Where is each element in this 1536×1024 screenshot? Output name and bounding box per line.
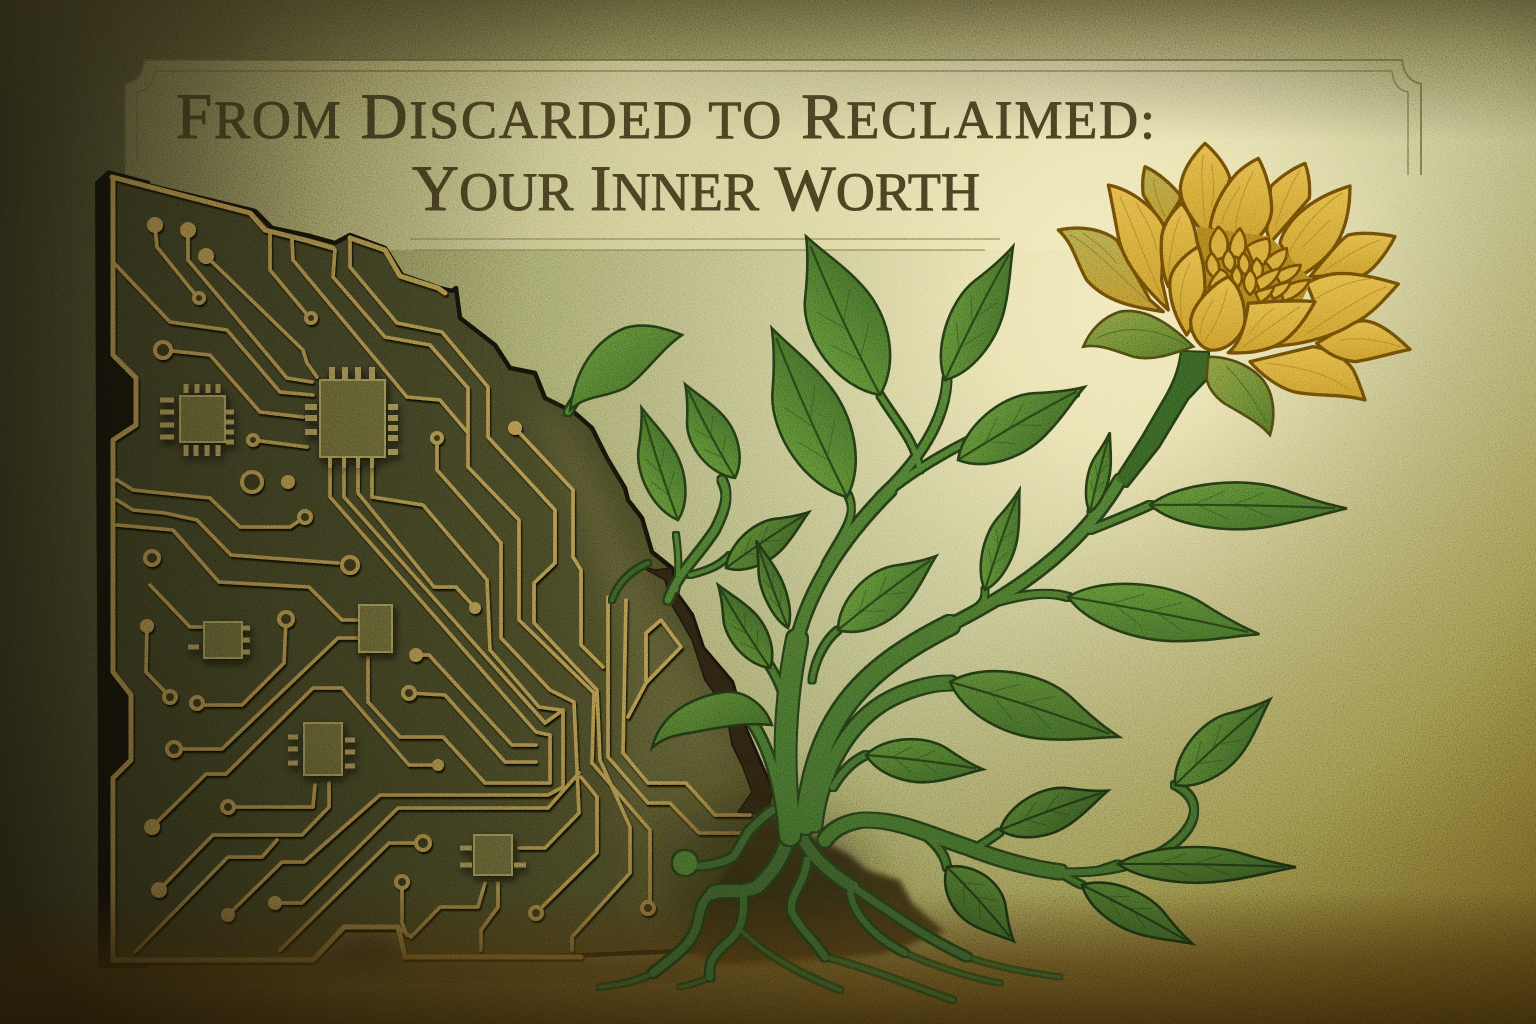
leaf: large right (1150, 481, 1347, 531)
petal inner left front (1170, 247, 1205, 335)
circuit board (95, 170, 800, 975)
plant (568, 143, 1410, 1000)
gold traces (112, 177, 750, 960)
leaf: base left, custom curve (652, 692, 772, 748)
petal back right (1267, 163, 1310, 243)
leaf: low branch right (1073, 868, 1202, 960)
petal right point (1310, 233, 1395, 277)
petal veins (1120, 155, 1400, 390)
leaf: top centre (772, 222, 912, 411)
leaf: near crack, custom curve (570, 326, 682, 410)
olive petal veins (1070, 180, 1165, 300)
chip: tall middle (359, 605, 392, 652)
ground shadow (0, 890, 1536, 1024)
board dark side edge (95, 170, 150, 968)
leaf: far right low (1159, 681, 1285, 802)
olive back petal left (1058, 228, 1163, 312)
flower heart base (1197, 227, 1312, 310)
leaf: left small 1 (622, 402, 697, 526)
sepal left (1083, 311, 1193, 358)
flower (1058, 143, 1410, 435)
leaf: low branch up (993, 770, 1115, 849)
leaf: lower left slim (746, 537, 798, 632)
board border trace (112, 177, 581, 960)
petal upper right (1280, 186, 1350, 277)
olive back petal (1143, 167, 1180, 227)
petal centre front (1191, 277, 1245, 350)
petal lower right (1250, 347, 1365, 400)
leaf: lower left small (703, 576, 785, 678)
board shadow on ground (112, 935, 700, 975)
petal left large (1108, 185, 1168, 310)
chip: lower middle (288, 723, 355, 775)
leaf: top right of centre (922, 235, 1034, 391)
crack (640, 566, 772, 815)
petal right big (1273, 273, 1398, 347)
background left shading (0, 0, 340, 1024)
trace lines (114, 225, 317, 447)
leaf: lower right (941, 653, 1129, 765)
stems (568, 352, 1208, 885)
leaf: left small 2 (666, 375, 753, 488)
petal top back (1180, 143, 1230, 233)
trace rings (145, 293, 654, 919)
leaf: low branch tip (1118, 846, 1296, 884)
root mound (650, 800, 945, 965)
sepal veins (1097, 330, 1267, 423)
leaf: slim upper (970, 485, 1034, 595)
trace pads (140, 217, 522, 922)
title text (176, 81, 1155, 225)
small heart petals (1206, 227, 1310, 303)
chip: large centre (305, 367, 398, 468)
chip: bottom (460, 835, 526, 875)
leaf: low centre (863, 733, 986, 790)
chip: small left (188, 622, 250, 658)
worn edge of board (530, 400, 735, 930)
leaf: slim by flower stem (1079, 430, 1120, 515)
leaf: mid lower (824, 537, 950, 648)
leaf: left small 3 (716, 497, 819, 582)
leaf: low branch down (930, 851, 1032, 957)
roots (600, 563, 1060, 1000)
background top shading (0, 0, 1536, 140)
sepal under (1207, 357, 1273, 435)
petal front right (1228, 301, 1315, 353)
petal middle top (1210, 158, 1272, 244)
leaf: mid right (944, 364, 1097, 482)
title line 1: FROM DISCARDED TO RECLAIMED: (176, 81, 1155, 153)
petal right low (1317, 321, 1410, 362)
leaf: large middle right (1063, 570, 1265, 659)
leaf: tall centre (740, 315, 877, 511)
title panel (125, 60, 1421, 250)
petal inner left (1161, 203, 1203, 287)
title line 2: YOUR INNER WORTH (412, 153, 980, 225)
chip: upper left (160, 384, 234, 456)
board surface (110, 176, 800, 963)
